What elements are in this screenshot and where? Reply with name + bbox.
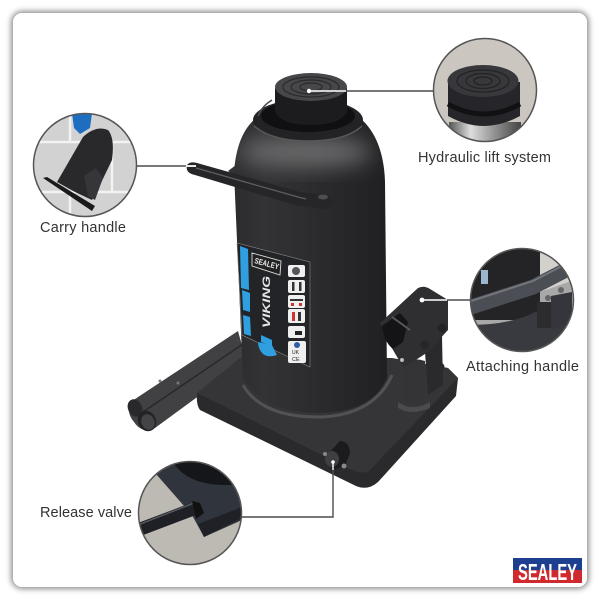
detail circle: hydraulic lift (433, 38, 537, 142)
stowed handle tubes (125, 331, 246, 434)
icon tile details: UK (292, 350, 300, 356)
release valve (323, 441, 350, 470)
jack cylinder body (234, 118, 387, 413)
product label (237, 243, 310, 367)
caption: carry handle: Carry handle (40, 220, 126, 236)
carry handle (187, 162, 333, 209)
detail circle: carry handle (33, 113, 137, 217)
dome collar (253, 99, 363, 141)
safety icon tiles (288, 265, 306, 363)
VIKING wordmark: VIKING (261, 275, 273, 328)
pump assembly (380, 287, 448, 412)
caption: attaching handle: Attaching handle (466, 359, 579, 375)
caption: hydraulic lift system: Hydraulic lift system (418, 150, 551, 166)
detail circle: attaching handle (465, 248, 574, 352)
SEALEY label badge: SEALEY (253, 256, 280, 272)
leader line: hydraulic lift (307, 89, 434, 93)
icon tile details (290, 267, 303, 363)
ram head (275, 73, 347, 125)
leader line: attaching handle (420, 298, 470, 302)
viking ship logo (258, 335, 277, 356)
jack base plate (197, 358, 458, 488)
leader line: carry handle (137, 165, 196, 167)
caption: release valve: Release valve (40, 505, 132, 521)
leader line: release valve (242, 460, 335, 517)
detail circle: release valve (138, 461, 242, 565)
icon tile details: CE (292, 357, 300, 363)
